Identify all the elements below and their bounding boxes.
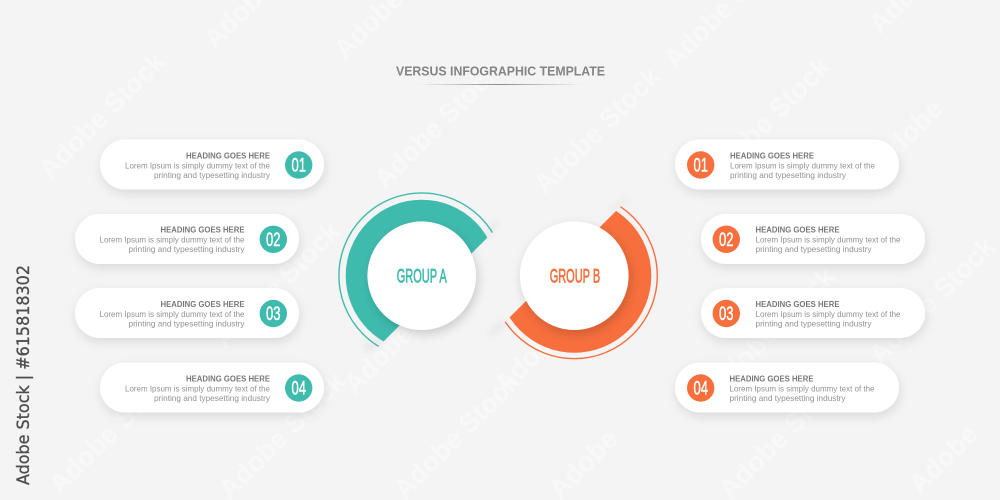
text: Adobe Stock xyxy=(33,46,172,184)
panel: left item 01 xyxy=(100,140,324,190)
panel: left item 03: HEADING GOES HERE xyxy=(160,299,245,309)
panel: right item 04: HEADING GOES HERE xyxy=(730,374,814,384)
text: Adobe Stock xyxy=(368,56,507,194)
panel: left item 02: 02 xyxy=(266,230,280,251)
stock credit: Adobe Stock | #615818302 xyxy=(14,265,34,485)
panel: right item 04: 04 xyxy=(694,378,708,400)
panel: right item 03: HEADING GOES HERE xyxy=(756,299,840,309)
panel: right item 02: Lorem Ipsum is simply dummy text of the xyxy=(756,234,901,244)
panel: right item 04 xyxy=(675,362,899,412)
panel: left item 01: 01 xyxy=(292,156,306,176)
panel: left item 03: Lorem Ipsum is simply dummy text of the xyxy=(100,309,245,319)
panel: right item 02: HEADING GOES HERE xyxy=(756,224,840,234)
panel: right item 03 xyxy=(701,288,925,338)
text: Adobe Stock xyxy=(528,61,667,199)
title: VERSUS INFOGRAPHIC TEMPLATE xyxy=(396,64,605,78)
panel: left item 03 xyxy=(75,288,299,338)
panel: left item 02: printing and typesetting industry xyxy=(128,244,245,254)
panel: left item 04: printing and typesetting industry xyxy=(154,393,271,403)
panel: left item 01: printing and typesetting industry xyxy=(154,170,271,180)
text: Adobe Stock xyxy=(703,261,842,399)
label: group B: GROUP B xyxy=(550,266,600,288)
panel: right item 02: printing and typesetting industry xyxy=(756,244,872,254)
text: Adobe Stock xyxy=(698,51,837,189)
text: Adobe Stock xyxy=(43,361,182,499)
panel: right item 01 xyxy=(675,140,899,190)
panel: right item 02: 02 xyxy=(719,230,734,251)
text: Adobe Stock xyxy=(863,231,1000,369)
panel: left item 03: printing and typesetting industry xyxy=(128,318,245,328)
panel: left item 04 xyxy=(100,362,324,412)
panel: left item 03: 03 xyxy=(266,304,280,325)
panel: left item 01: HEADING GOES HERE xyxy=(186,150,270,160)
panel: left item 04: HEADING GOES HERE xyxy=(186,374,270,384)
panel: left item 02 xyxy=(75,214,299,264)
panel: right item 03: Lorem Ipsum is simply dummy text of the xyxy=(756,309,901,319)
text: Adobe Stock xyxy=(208,216,347,354)
panel: left item 04: 04 xyxy=(292,378,306,400)
panel: right item 04: Lorem Ipsum is simply dummy text of the xyxy=(730,384,875,394)
panel: right item 01: 01 xyxy=(694,156,708,176)
panel: group B circle xyxy=(504,206,658,360)
text: Adobe Stock xyxy=(338,261,477,399)
text: Adobe xyxy=(903,419,984,499)
panel: left item 02: HEADING GOES HERE xyxy=(160,224,245,234)
panel: left item 01: Lorem Ipsum is simply dummy text of the xyxy=(125,160,270,170)
panel: right item 01: Lorem Ipsum is simply dummy text of the xyxy=(730,160,875,170)
panel: right item 04: printing and typesetting industry xyxy=(730,393,846,403)
text: Adobe xyxy=(868,94,949,174)
panel: right item 02 xyxy=(701,214,925,264)
panel: right item 01: HEADING GOES HERE xyxy=(730,150,814,160)
panel: right item 03: printing and typesetting industry xyxy=(756,318,872,328)
panel: group A circle xyxy=(338,192,493,348)
panel: right item 01: printing and typesetting industry xyxy=(730,170,847,180)
panel: left item 02: Lorem Ipsum is simply dummy text of the xyxy=(100,234,245,244)
text: Adobe Stock xyxy=(488,261,627,399)
label: group A: GROUP A xyxy=(397,266,447,288)
panel: left item 04: Lorem Ipsum is simply dummy text of the xyxy=(125,384,270,394)
panel: right item 03: 03 xyxy=(719,304,734,325)
